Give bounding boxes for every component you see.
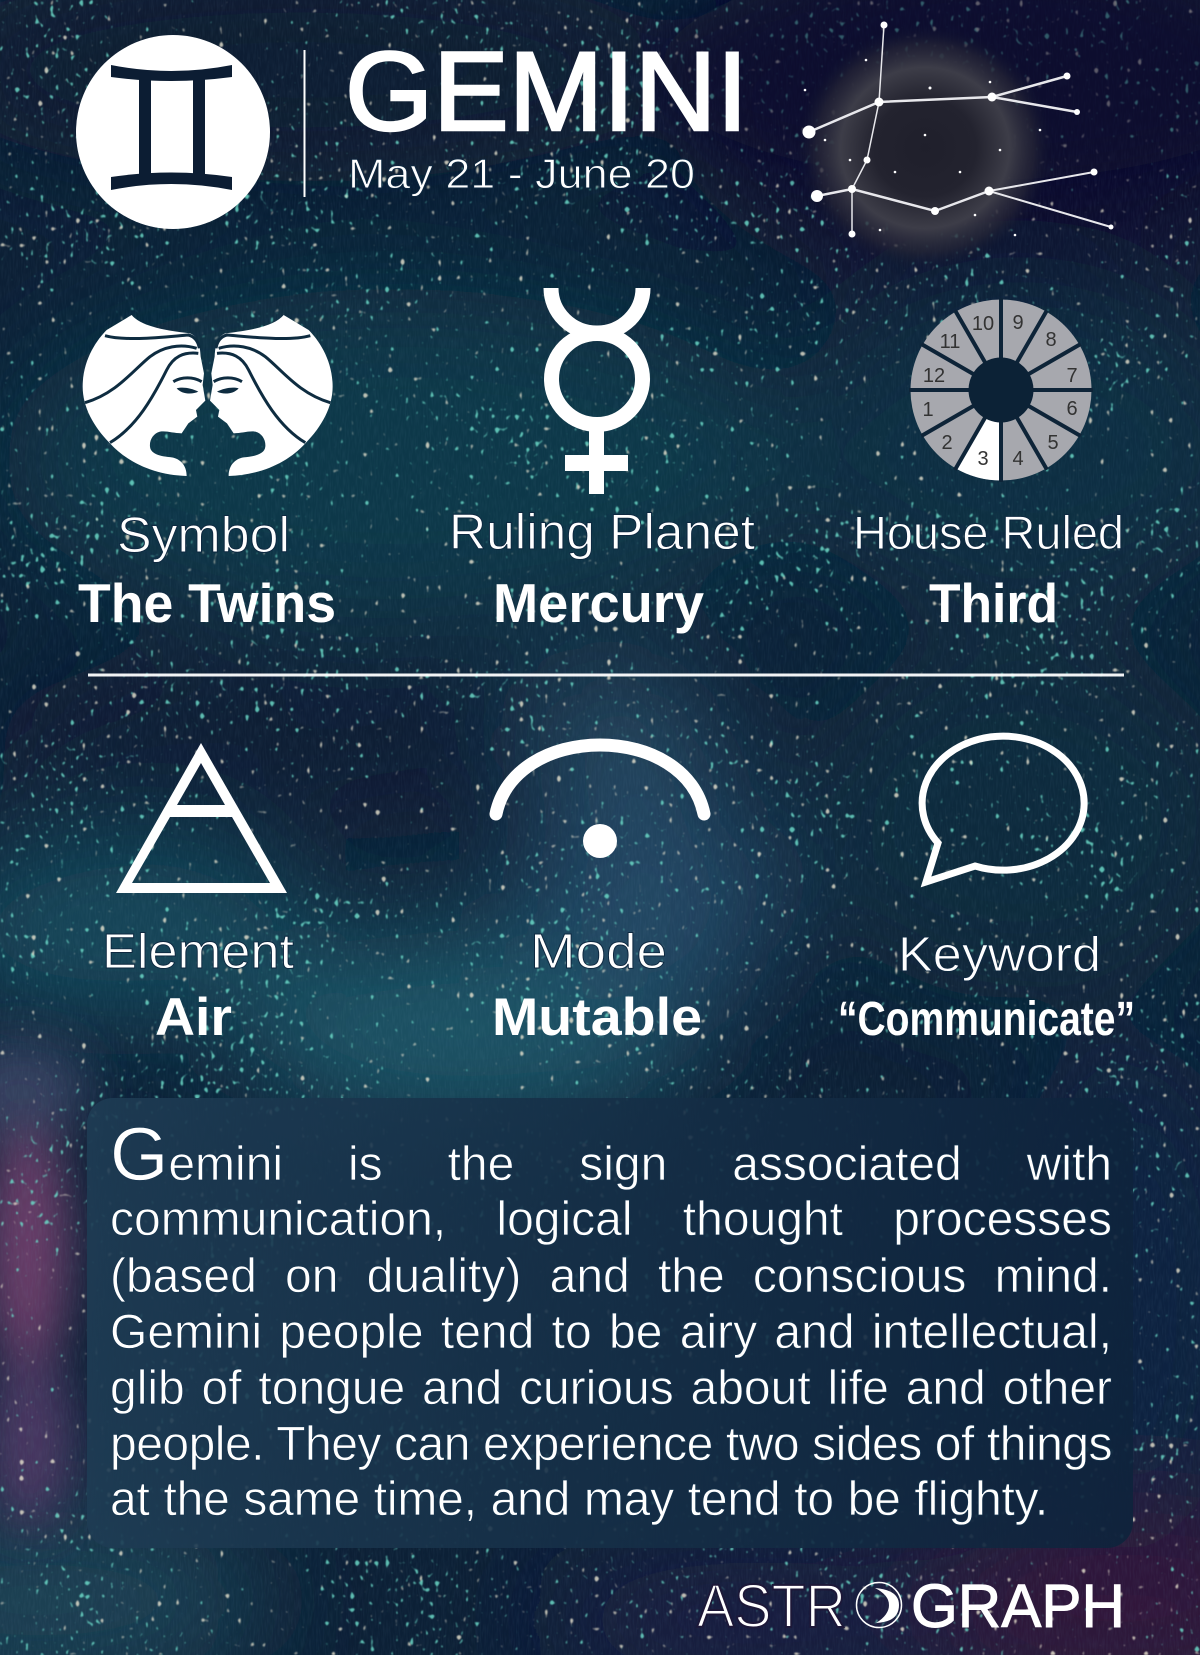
icon: house wheel: 7 <box>1066 365 1078 387</box>
label: House Ruled: House Ruled <box>853 506 1124 559</box>
date range: May 21 - June 20 <box>348 150 695 197</box>
icon: house wheel: 2 <box>941 432 953 454</box>
description line 5: glib of tongue and curious about life and other <box>110 1362 1112 1415</box>
description panel <box>87 1098 1133 1548</box>
icon: house wheel <box>909 298 1093 482</box>
icon: house wheel: 12 <box>923 365 945 387</box>
icon: house wheel: 5 <box>1047 432 1059 454</box>
label: Symbol: Symbol <box>117 507 290 563</box>
icon: Mercury glyph <box>551 288 643 494</box>
label: Keyword: Keyword <box>898 928 1101 982</box>
logo: ASTROGRAPH <box>697 1572 1125 1640</box>
header: Gemini glyph badge <box>76 35 270 229</box>
description line 4: Gemini people tend to be airy and intellectual, <box>110 1306 1112 1359</box>
label: Element: Element <box>102 925 294 979</box>
icon: house wheel: 1 <box>922 399 934 421</box>
icon: house wheel: 6 <box>1066 398 1078 420</box>
description line 6: people. They can experience two sides of things <box>110 1418 1112 1471</box>
icon: speech bubble <box>922 736 1084 882</box>
logo: ASTROGRAPH: ASTR <box>697 1572 846 1640</box>
icon: house wheel: 3 <box>977 448 989 470</box>
value: Mercury: Mercury <box>493 572 704 634</box>
icon: house wheel: 4 <box>1012 448 1024 470</box>
description line 2: communication, logical thought processes <box>110 1193 1112 1246</box>
description line 7: at the same time, and may tend to be flighty. <box>110 1473 1048 1526</box>
value: The Twins: The Twins <box>78 572 336 634</box>
label: Mode: Mode <box>530 925 667 979</box>
title: GEMINI <box>345 29 748 154</box>
description line 3: (based on duality) and the conscious mind. <box>110 1250 1112 1303</box>
section divider <box>88 674 1124 676</box>
icon: house wheel: 8 <box>1045 329 1057 351</box>
value: Third: Third <box>929 572 1058 634</box>
icon: air element triangle <box>116 743 287 893</box>
icon: house wheel: 9 <box>1012 312 1024 334</box>
icon: house wheel: 10 <box>972 313 994 335</box>
value: Communicate: “Communicate” <box>838 993 1135 1046</box>
label: Ruling Planet: Ruling Planet <box>449 504 755 560</box>
icon: mutable mode <box>496 745 704 858</box>
value: Air: Air <box>155 988 232 1047</box>
description line 1: Gemini is the sign associated with <box>110 1112 1112 1196</box>
value: Mutable: Mutable <box>492 988 702 1047</box>
header divider <box>304 50 306 197</box>
icon: house wheel: 11 <box>940 331 960 353</box>
logo: ASTROGRAPH: GRAPH <box>911 1572 1125 1640</box>
icon: twins symbol <box>83 315 333 476</box>
constellation <box>797 22 1114 270</box>
